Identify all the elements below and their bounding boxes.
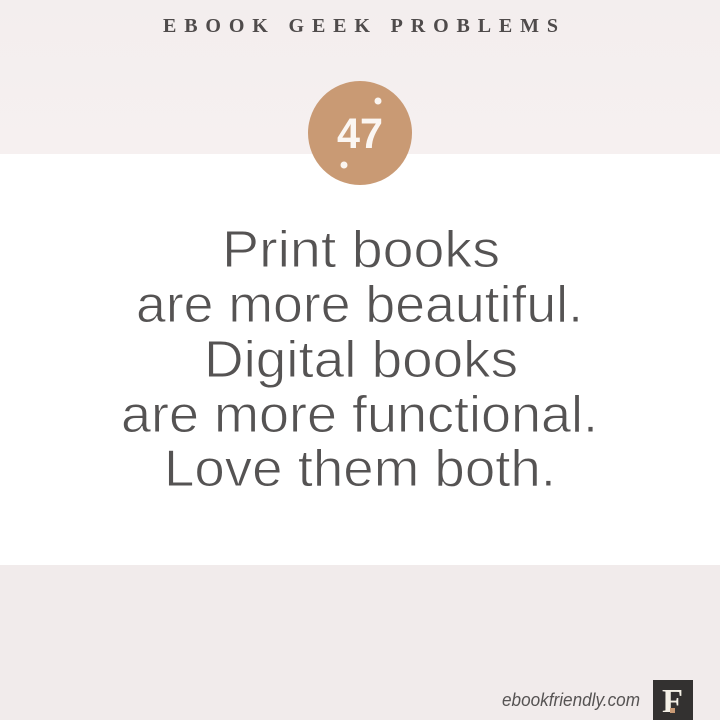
panel: white centre <box>0 154 720 565</box>
text block: main message: Digital books <box>204 331 518 389</box>
badge: problem number 47: 47 <box>337 110 383 158</box>
panel: bottom band <box>0 565 720 720</box>
badge: problem number 47 <box>308 81 412 185</box>
website credit: ebookfriendly.com <box>502 690 640 710</box>
icon: Ebook Friendly logo <box>653 680 693 720</box>
heading: series title: EBOOK GEEK PROBLEMS <box>163 15 558 37</box>
text block: main message: Print books <box>222 221 500 279</box>
icon: Ebook Friendly logo: F <box>662 683 683 720</box>
text block: main message <box>121 221 598 498</box>
panel: top band <box>0 0 720 154</box>
text block: main message: are more beautiful. <box>136 276 583 334</box>
text block: main message: Love them both. <box>164 440 556 498</box>
text block: main message: are more functional. <box>121 386 598 444</box>
